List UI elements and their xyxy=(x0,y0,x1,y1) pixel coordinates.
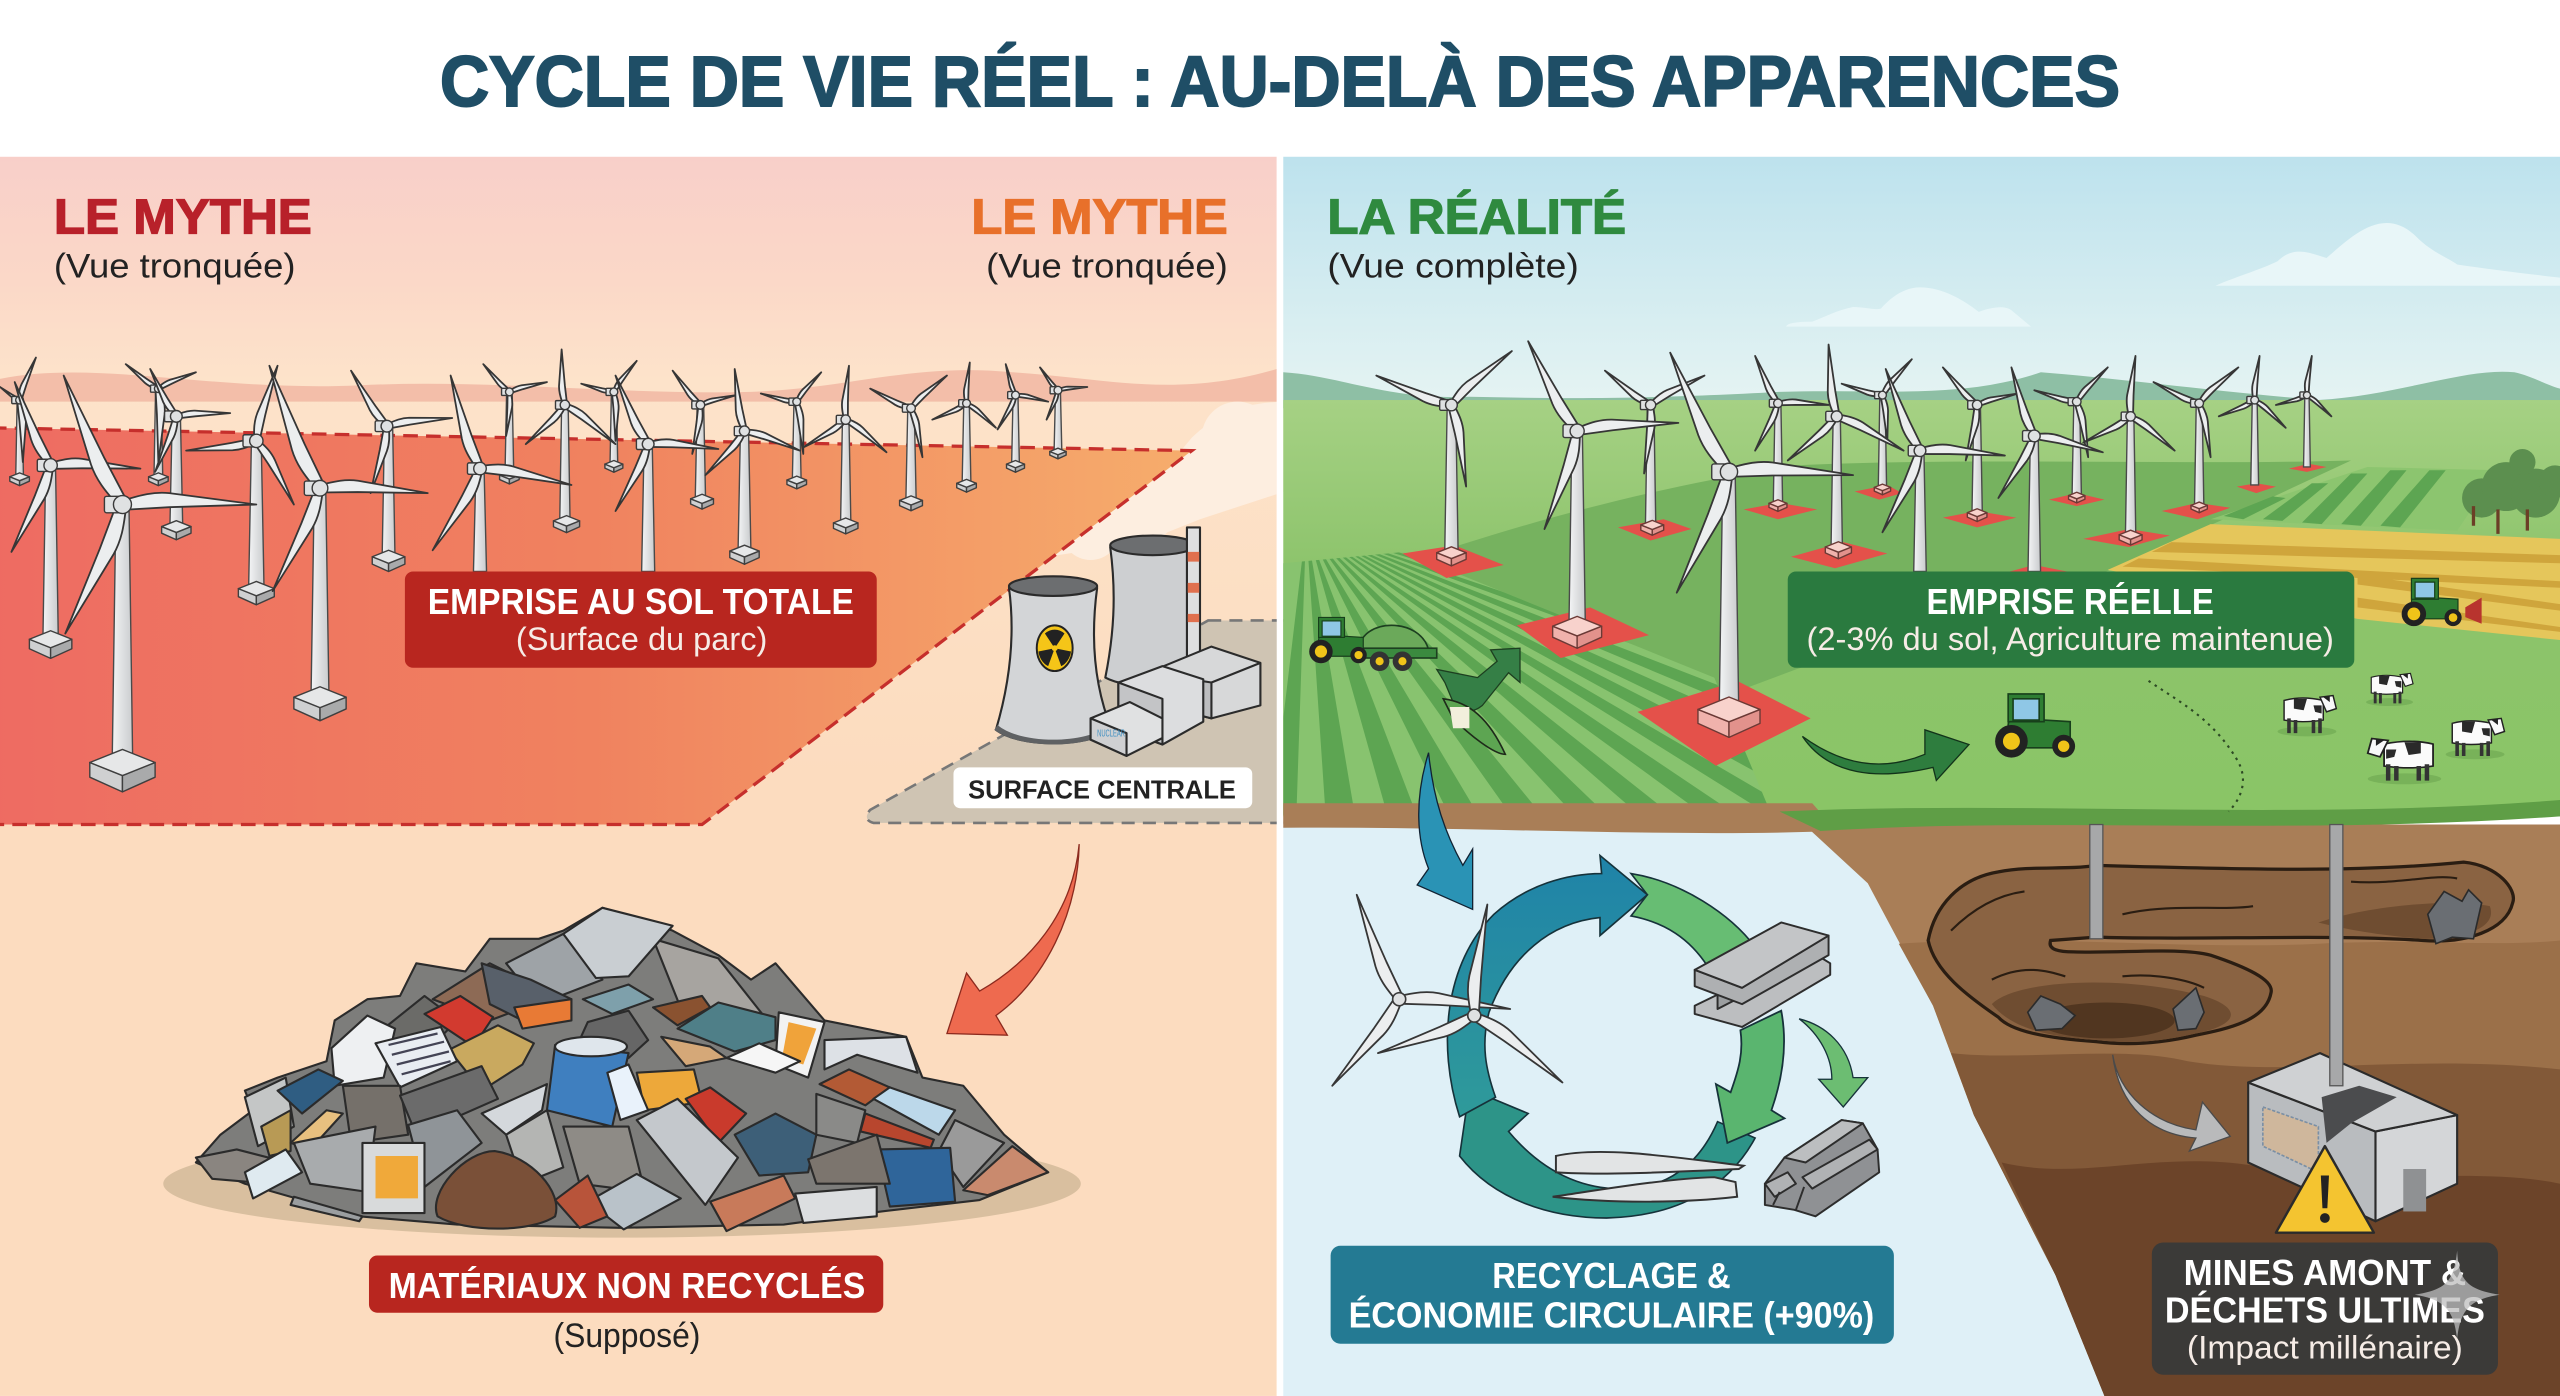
clouds xyxy=(1786,223,2560,327)
trees xyxy=(2462,449,2560,534)
label: emprise au sol totale: EMPRISE AU SOL TOTALE xyxy=(428,581,854,622)
caption: supposé: (Supposé) xyxy=(553,1317,700,1355)
arrow: green top xyxy=(1631,874,1755,967)
wind turbines: myth xyxy=(0,349,1087,792)
label: surface centrale: SURFACE CENTRALE xyxy=(968,774,1236,804)
harvester xyxy=(1309,617,1437,671)
arrow: green right xyxy=(1716,1011,1784,1143)
label: recyclage xyxy=(1331,1246,1894,1344)
title: CYCLE DE VIE RÉEL : AU-DELÀ DES APPARENCES xyxy=(440,42,2120,122)
heading: la réalité xyxy=(1327,191,1626,286)
label: matériaux non recyclés xyxy=(369,1256,883,1313)
heading: la réalité: (Vue complète) xyxy=(1327,248,1579,286)
recycling loop xyxy=(1329,753,1879,1218)
arrow: field to recycling xyxy=(1417,753,1473,909)
arrow: teal bottom xyxy=(1460,1089,1755,1218)
sky xyxy=(1283,157,2560,418)
sparkle xyxy=(2415,1251,2500,1339)
panel: le mythe xyxy=(0,157,1293,1396)
arrow: pasture xyxy=(1802,730,1969,780)
farmland xyxy=(1283,400,2560,816)
darker rolling ground xyxy=(1404,460,2351,694)
striped field: upper right xyxy=(2211,467,2498,531)
cows xyxy=(2278,673,2504,784)
panel gap xyxy=(1277,157,1283,1396)
rocks xyxy=(2028,890,2482,1030)
heading: le mythe right: (Vue tronquée) xyxy=(986,248,1228,286)
nuclear plant: NUCLEAR xyxy=(1097,728,1125,739)
arrow: small green xyxy=(1799,1019,1868,1107)
red pads xyxy=(1402,464,2327,766)
label: emprise réelle: (2-3% du sol, Agriculture maintenue) xyxy=(1807,620,2334,657)
tractor xyxy=(1995,694,2075,758)
heading: le mythe left: (Vue tronquée) xyxy=(54,248,296,286)
surface strip xyxy=(1283,800,2560,833)
label: mines amont et déchets ultimes: DÉCHETS ULTIMES xyxy=(2165,1289,2485,1330)
recycled blades xyxy=(1556,1152,1744,1174)
myth background xyxy=(0,157,1277,1396)
arrow: blue left xyxy=(1447,856,1647,1117)
label: emprise réelle: EMPRISE RÉELLE xyxy=(1927,581,2214,622)
label: recyclage: ÉCONOMIE CIRCULAIRE (+90%) xyxy=(1349,1294,1874,1335)
grey arrow: mine to bunker xyxy=(2113,1055,2230,1151)
waste bunker xyxy=(2248,825,2457,1221)
label: emprise réelle xyxy=(1788,571,2354,668)
central plant surface xyxy=(867,620,1293,823)
soil layers xyxy=(1804,825,2560,1396)
label: mines amont et déchets ultimes: MINES AMONT & xyxy=(2184,1252,2466,1293)
yellow field xyxy=(2108,524,2560,640)
wind turbines: reality xyxy=(1374,339,2333,737)
wind farm footprint zone xyxy=(0,428,1192,825)
heading: le mythe right: LE MYTHE xyxy=(971,191,1228,245)
panel: la réalité xyxy=(1283,157,2560,1396)
label: emprise au sol totale xyxy=(405,571,877,668)
machinery in field xyxy=(1309,617,1520,754)
shafts xyxy=(2090,825,2103,939)
heading: le mythe right xyxy=(971,191,1228,286)
striped field: lower left xyxy=(1283,552,1766,815)
waste pile xyxy=(163,908,1081,1238)
label: surface centrale xyxy=(953,767,1252,808)
distant hills xyxy=(0,369,1277,402)
nuclear plant xyxy=(994,527,1260,756)
smoke xyxy=(1037,402,1290,560)
heading: le mythe left: LE MYTHE xyxy=(54,191,312,245)
label: matériaux non recyclés: MATÉRIAUX NON RECYCLÉS xyxy=(389,1265,865,1306)
arrow: plant to waste xyxy=(947,844,1079,1035)
heading: le mythe left xyxy=(54,191,312,286)
steel beams: upper xyxy=(1695,922,1830,1027)
animal tracks xyxy=(2149,681,2243,811)
label: recyclage: RECYCLAGE & xyxy=(1492,1255,1731,1296)
tractor on yellow field xyxy=(2402,578,2482,626)
light recycling ground xyxy=(1283,826,2104,1396)
label: mines amont et déchets ultimes: (Impact millénaire) xyxy=(2187,1328,2463,1365)
heading: la réalité: LA RÉALITÉ xyxy=(1327,191,1626,245)
label: mines amont et déchets ultimes xyxy=(2152,1242,2498,1375)
hills xyxy=(1283,372,2560,408)
icon: radioactive symbol xyxy=(1037,625,1073,671)
cut swath xyxy=(1443,699,1505,754)
recycling turbines xyxy=(1329,893,1568,1092)
icon: warning triangle xyxy=(2276,1146,2374,1233)
arrow: harvester xyxy=(1437,648,1520,711)
label: emprise au sol totale: (Surface du parc) xyxy=(516,620,767,657)
open pit mine xyxy=(1928,862,2513,1044)
steel beams: lower xyxy=(1765,1120,1879,1216)
